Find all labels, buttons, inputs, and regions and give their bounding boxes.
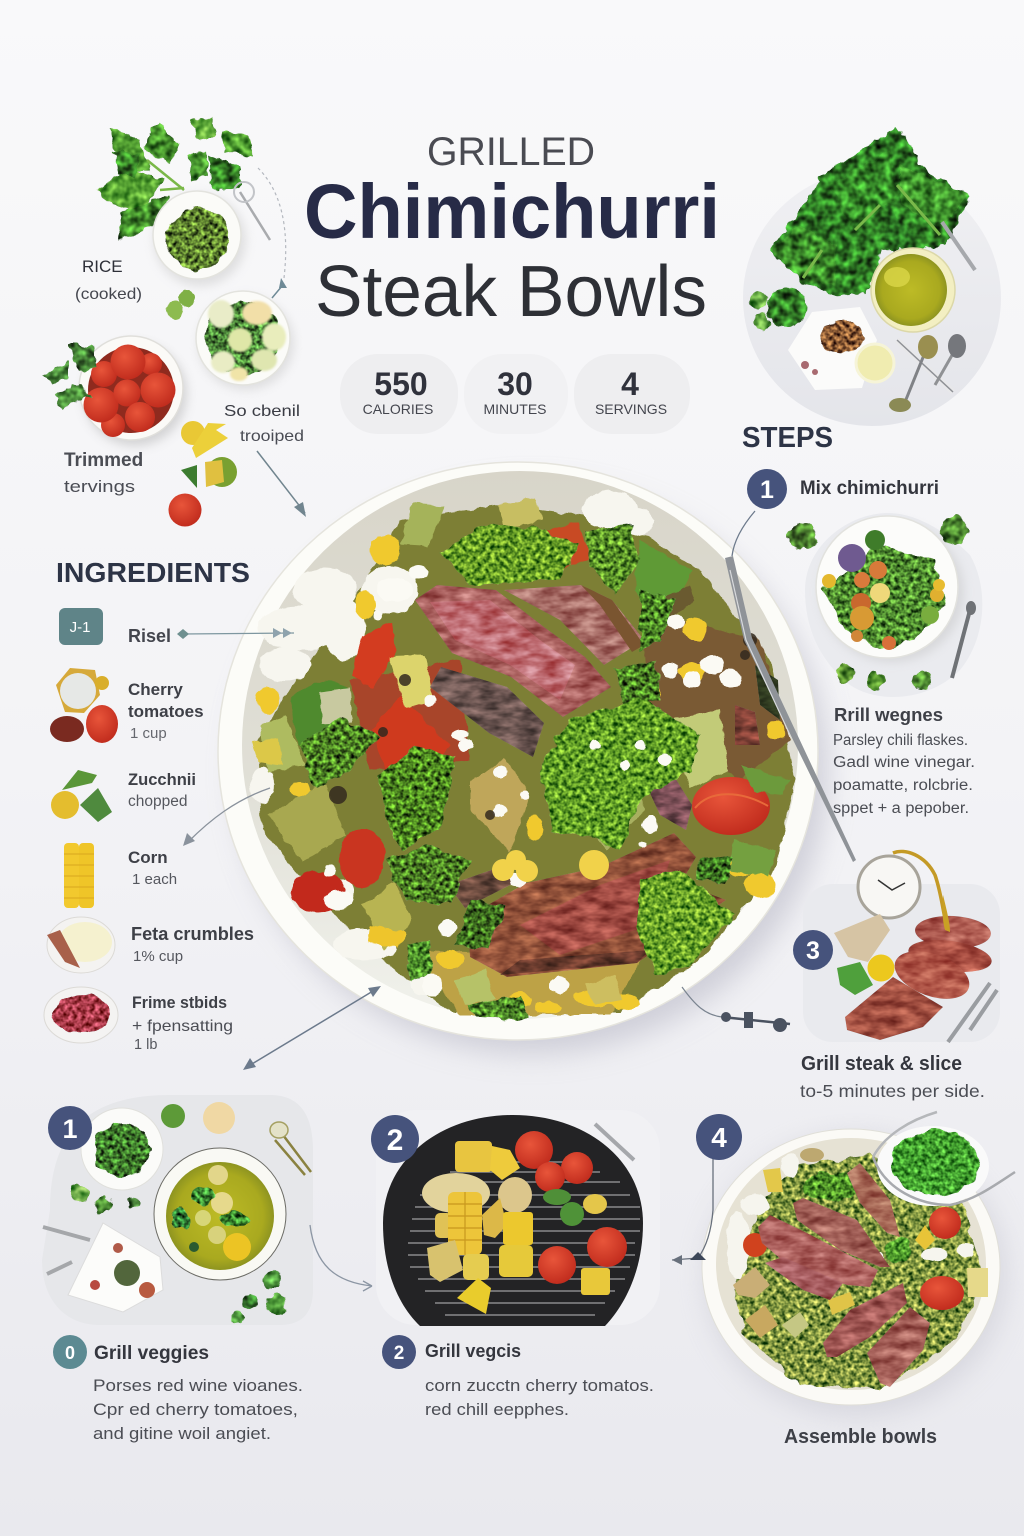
- ingredient: zucchini: [51, 770, 196, 822]
- pale corn kernels: [492, 850, 609, 882]
- ingredient: zucchini: chopped: [128, 793, 187, 810]
- green and yellow: [837, 962, 873, 995]
- connector: bowl to step 3: [682, 987, 790, 1032]
- herb dish with servers: [873, 1112, 1015, 1206]
- badge: calories: CALORIES: [363, 401, 433, 417]
- ingredient: rice: J-1: [70, 619, 90, 636]
- parsley: [770, 127, 970, 295]
- top steak slices: [415, 585, 644, 757]
- bottom badge 2: 2: [387, 1124, 403, 1157]
- bottom caption 1: 0: [65, 1343, 75, 1363]
- food base: [258, 505, 795, 1015]
- feta crumbles: [323, 565, 741, 996]
- badge: servings: SERVINGS: [595, 401, 667, 417]
- bottom caption 2: 2: [394, 1343, 404, 1364]
- left-column label: trimmed: [64, 450, 143, 496]
- step 1 text block: Gadl wine vinegar.: [833, 754, 975, 771]
- herb sprigs: [789, 516, 969, 690]
- sliced steak: [758, 1163, 930, 1387]
- bottom badge 4: [696, 1114, 742, 1160]
- hero tomato: [692, 777, 770, 835]
- ingredient: rice: Risel: [128, 626, 171, 646]
- ingredient: corn: Corn: [128, 848, 168, 867]
- fork: [725, 556, 856, 862]
- zucchini salad bowl: [196, 291, 294, 390]
- bottom badge 1: [48, 1106, 92, 1150]
- bottom caption 1: Porses red wine vioanes.: [93, 1376, 303, 1395]
- badge: minutes: 30: [497, 366, 533, 402]
- grilled vegetables: [422, 1131, 627, 1314]
- left-column label: chopped: So cbenil: [224, 403, 300, 420]
- chimichurri on bowl: [803, 1172, 911, 1263]
- badge: calories: 550: [374, 366, 428, 402]
- arrow: rice to bowl: [177, 628, 294, 639]
- food base: [735, 1155, 985, 1390]
- zucchini chunks: [252, 498, 790, 1005]
- title: [304, 130, 720, 332]
- lemon slice: [856, 344, 894, 382]
- bottom caption 2: [382, 1335, 654, 1419]
- step 1 label: 1: [760, 476, 774, 504]
- ingredient: cherry tomatoes: Cherry: [128, 680, 183, 699]
- arrow: panel 1 to panel 2: [310, 1225, 372, 1291]
- ingredient: cherry tomatoes: 1 cup: [130, 725, 167, 742]
- gold spoons: [270, 1122, 311, 1175]
- arrow: panel 2 to panel 4: [672, 1158, 713, 1265]
- leaves: [71, 1184, 287, 1324]
- plate with flakes: [68, 1223, 163, 1312]
- bowl shadow: [236, 486, 828, 1054]
- ingredient: chili: 1 lb: [134, 1037, 157, 1053]
- left-column label: trimmed: tervings: [64, 477, 135, 496]
- rice: [726, 1153, 975, 1279]
- char marks: [329, 633, 757, 820]
- step 3 caption: [800, 1053, 985, 1101]
- tomato herb sprig: [43, 345, 95, 408]
- left-column label: rice: RICE: [82, 257, 123, 276]
- step 1 text block: Rrill wegnes: [834, 705, 943, 725]
- title: Steak Bowls: [315, 252, 707, 332]
- step 3 badge: [793, 930, 833, 970]
- badge: servings: [574, 354, 690, 434]
- bottom caption 2: corn zucctn cherry tomatos.: [425, 1376, 654, 1395]
- clock: [858, 856, 920, 918]
- left-column label: rice: (cooked): [75, 286, 142, 303]
- ingredient: rice: [59, 608, 171, 646]
- utensils: [43, 1227, 90, 1274]
- ingredient: corn: [64, 843, 177, 908]
- step 1 text block: [833, 705, 975, 817]
- bottom caption 4: Assemble bowls: [784, 1426, 937, 1448]
- ingredient: corn: 1 each: [132, 871, 177, 888]
- ingredient: cherry tomatoes: tomatoes: [128, 702, 204, 721]
- small steak and dark pieces: [448, 665, 780, 908]
- ingredient: feta: Feta crumbles: [131, 923, 254, 944]
- bottom badge 1: 1: [62, 1114, 78, 1144]
- tomato bowl: [43, 336, 187, 446]
- step 1 salad bowl: [789, 513, 982, 697]
- cutlery: [948, 983, 997, 1042]
- bottom panel 4: assembled bowl: [702, 1112, 1015, 1415]
- title: GRILLED: [427, 130, 595, 174]
- bottom panel 2: grill pan: [376, 1110, 660, 1326]
- tomatoes in bowl: [291, 522, 590, 913]
- parsley bunch: [97, 118, 252, 240]
- arrow: zucchini to bowl: [183, 788, 270, 846]
- bottom caption 1: [53, 1335, 303, 1443]
- badge: calories: [340, 354, 458, 434]
- step 3 steak plate: [803, 851, 1000, 1042]
- arrow: curved garnish: [258, 168, 287, 298]
- spoon: [234, 182, 270, 240]
- arrow: label to bowl: [257, 451, 306, 517]
- top-left garnish: parsley and bowls: [43, 118, 294, 526]
- step 1 text block: sppet + a pepober.: [833, 800, 969, 817]
- chimichurri sauce: [300, 522, 735, 1020]
- title: Chimichurri: [304, 169, 720, 255]
- bottom caption 1: and gitine woil angiet.: [93, 1424, 271, 1443]
- step 1 label: [747, 469, 939, 509]
- vegetable pieces: [733, 1148, 988, 1338]
- arrow: bottom double: [243, 986, 381, 1070]
- small herbs: [750, 288, 807, 329]
- ingredient: chili: + fpensatting: [132, 1018, 233, 1035]
- step 1 text block: Parsley chili flaskes.: [833, 732, 968, 749]
- steps heading: STEPS: [742, 422, 833, 454]
- herb bowl: [153, 191, 246, 286]
- tongs: [952, 601, 976, 678]
- ingredient: feta: [47, 917, 254, 973]
- badge: minutes: MINUTES: [484, 401, 546, 417]
- oil drizzle: [893, 851, 948, 930]
- step 1 label: Mix chimichurri: [800, 478, 939, 499]
- ingredient: zucchini: Zucchnii: [128, 770, 196, 789]
- ingredients heading: INGREDIENTS: [56, 557, 250, 588]
- chili flakes on paper: [788, 307, 877, 390]
- badge: minutes: [464, 354, 568, 434]
- bottom badge 2: [371, 1115, 419, 1163]
- bottom steak: [467, 833, 726, 977]
- oil bowl: [154, 1148, 286, 1280]
- corn, zucchini and tomato pieces: [168, 421, 237, 526]
- small leaf: [166, 290, 195, 319]
- bottom caption 1: Grill veggies: [94, 1343, 209, 1364]
- step 1 text block: poamatte, rolcbrie.: [833, 777, 973, 794]
- left-column label: chopped: [224, 403, 304, 445]
- corn and yellow pieces: [256, 535, 785, 1014]
- main bowl: [218, 462, 856, 1054]
- tongs: [595, 1124, 634, 1160]
- rice clumps: [250, 490, 654, 995]
- cutlery: [889, 222, 975, 412]
- left-column label: chopped: trooiped: [240, 428, 304, 445]
- left-column label: rice: [75, 257, 142, 303]
- bottom caption 2: red chill eepphes.: [425, 1400, 569, 1419]
- top-right herb plate: [743, 127, 1001, 426]
- step 3 caption: Grill steak & slice: [801, 1053, 962, 1075]
- ingredient: chili: [44, 987, 233, 1053]
- salad toppings: [822, 530, 945, 650]
- bottom badge 4: 4: [711, 1122, 727, 1153]
- herb bowl: [81, 1108, 163, 1190]
- olive oil bowl: [871, 248, 955, 332]
- stat badges: [340, 354, 690, 434]
- garnish: [161, 1102, 235, 1134]
- left-column label: trimmed: Trimmed: [64, 450, 143, 471]
- bottom panel 1: chimichurri prep: [42, 1095, 313, 1325]
- pate slice: [834, 914, 890, 962]
- bottom caption 1: Cpr ed cherry tomatoes,: [93, 1400, 298, 1419]
- bowl rim: [218, 462, 818, 1040]
- ingredient: feta: 1% cup: [133, 948, 183, 965]
- steak pieces: [845, 914, 994, 1040]
- step 3 badge: 3: [806, 937, 820, 965]
- ingredient: chili: Frime stbids: [132, 994, 227, 1012]
- bottom caption 2: Grill vegcis: [425, 1341, 521, 1361]
- badge: servings: 4: [621, 366, 639, 402]
- ingredient: cherry tomatoes: [50, 668, 204, 743]
- leader from step 1 to bowl: [732, 511, 755, 556]
- step 3 caption: to-5 minutes per side.: [800, 1081, 985, 1101]
